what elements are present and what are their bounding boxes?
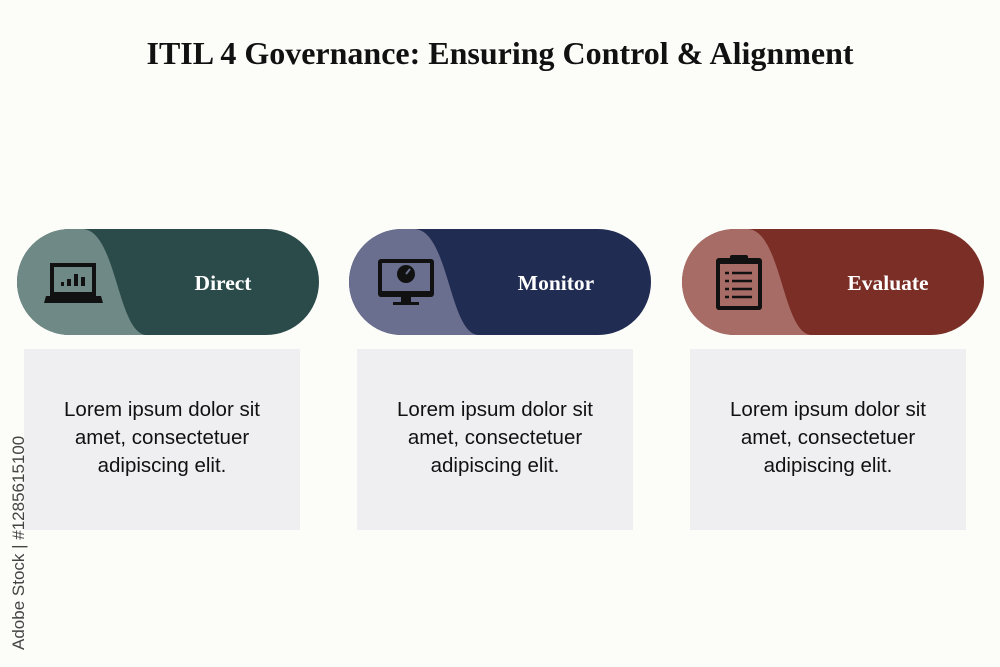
text: Evaluate: Lorem ipsum dolor sit — [730, 398, 926, 421]
label: Evaluate: Evaluate — [847, 271, 929, 295]
text: Direct — [64, 398, 260, 477]
title: ITIL 4 Governance: Ensuring Control & Alignment — [146, 35, 854, 71]
text: Monitor: adipiscing elit. — [431, 454, 559, 477]
text: Monitor: Lorem ipsum dolor sit — [397, 398, 593, 421]
panel: Evaluate text — [690, 349, 966, 530]
text: Evaluate: adipiscing elit. — [764, 454, 892, 477]
pill: Monitor — [349, 229, 651, 335]
icon: monitor gauge — [378, 259, 434, 305]
text: Evaluate: amet, consectetuer — [741, 426, 915, 449]
text: Direct: amet, consectetuer — [75, 426, 249, 449]
label: Direct: Direct — [195, 271, 252, 295]
icon: laptop chart — [44, 263, 103, 303]
label: Monitor: Monitor — [518, 271, 595, 295]
text: Monitor — [397, 398, 593, 477]
text: Evaluate — [730, 398, 926, 477]
text: Direct: adipiscing elit. — [98, 454, 226, 477]
text: Monitor: amet, consectetuer — [408, 426, 582, 449]
panel: Monitor text — [357, 349, 633, 530]
text: Direct: Lorem ipsum dolor sit — [64, 398, 260, 421]
icon: clipboard — [716, 255, 762, 310]
panel: Direct text — [24, 349, 300, 530]
pill: Direct — [17, 229, 319, 335]
watermark id: Adobe Stock | #1285615100 — [9, 436, 28, 650]
pill: Evaluate — [682, 229, 984, 335]
